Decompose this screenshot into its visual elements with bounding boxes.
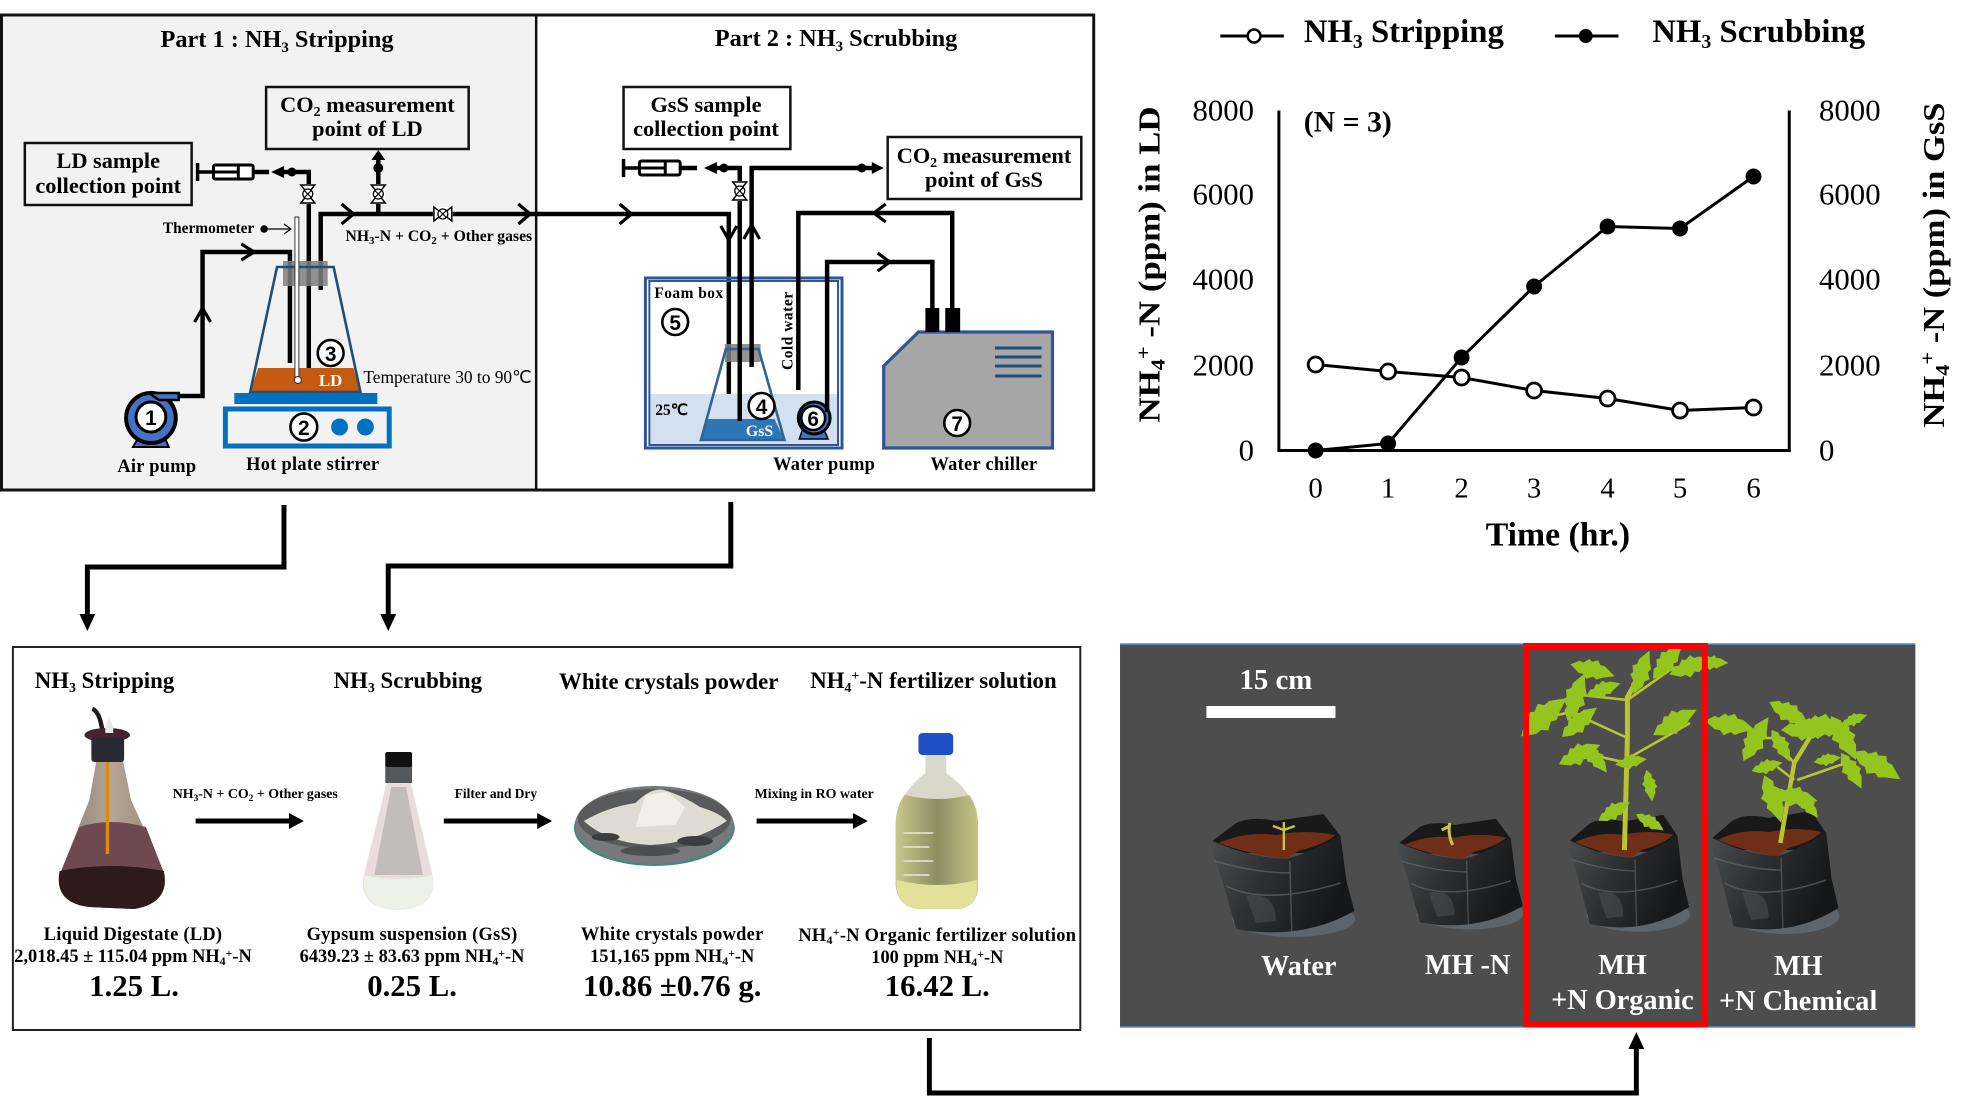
box: CO2 measurement point of LD: 2 (314, 105, 321, 120)
arrow: part 2 to scrubbing (380, 502, 731, 631)
text: white crystals: 151,165 ppm NH (590, 946, 722, 966)
box: LD sample collection point (25, 143, 192, 205)
photo: liquid digestate flask (59, 709, 165, 909)
label: filter and dry: Filter and Dry (455, 786, 537, 801)
text: organic fertilizer: + (833, 925, 840, 939)
label: water: Water (1261, 951, 1336, 982)
label: water pump: Water pump (773, 454, 875, 474)
text: gypsum suspension: Gypsum suspension (GsS) (307, 924, 518, 945)
heading: white crystals powder: White crystals powder (559, 669, 778, 694)
label: MH +N chemical: +N Chemical (1719, 986, 1877, 1017)
label: gases: NH (173, 787, 194, 802)
pipe: CO2 branch (371, 150, 385, 214)
photo: gypsum suspension flask (363, 752, 433, 910)
box: CO2 measurement point of GsS: CO (897, 143, 930, 168)
left axis ticks: 6000 (1193, 176, 1254, 212)
heading: fertilizer solution: NH (810, 668, 844, 693)
box: CO2 measurement point of GsS: 2 (930, 156, 937, 171)
icon: water pump: 6 (807, 408, 819, 431)
left axis ticks: 0 (1239, 432, 1254, 468)
legend: scrubbing: NH (1652, 14, 1701, 50)
badge: 5 (662, 309, 688, 335)
box: LD sample collection point: LD sample (56, 148, 160, 173)
x axis ticks: 4 (1600, 472, 1615, 505)
right axis title: -N (ppm) in GsS (1916, 102, 1951, 352)
icon: hot plate stirrer: 2 (298, 417, 310, 440)
right axis ticks: 8000 (1819, 92, 1881, 128)
heading: part 1: Part 1 : NH (160, 26, 281, 53)
text: gypsum suspension: 4 (492, 954, 498, 968)
badge: 4: 4 (756, 396, 768, 419)
arrow: fertilizer to plants (929, 1032, 1644, 1093)
text: liquid digestate: Liquid Digestate (LD) (44, 924, 222, 945)
right axis title: NH (1916, 381, 1951, 428)
x axis title: Time (hr.) (1486, 516, 1630, 554)
arrow: part 1 to stripping (79, 505, 284, 631)
left axis title: -N (ppm) in LD (1132, 106, 1167, 346)
label: water chiller: Water chiller (930, 454, 1038, 474)
text: organic fertilizer: 16.42 L. (885, 968, 990, 1003)
label: gases: + Other gases (253, 787, 338, 802)
box: CO2 measurement point of GsS: measurement (937, 143, 1072, 168)
panel: schematic frame (1, 15, 1094, 490)
text: white crystals (581, 924, 764, 1003)
icon: air pump: 1 (145, 407, 157, 430)
panel: plant photo (1120, 637, 1915, 1027)
foam box (645, 278, 842, 448)
label: gases: 3 (194, 794, 199, 804)
flask: LD (250, 217, 360, 392)
line chart (1132, 92, 1954, 554)
scale: 15 cm (1206, 664, 1335, 718)
x axis ticks: 5 (1673, 472, 1687, 505)
text: liquid digestate: 2,018.45 ± 115.04 ppm NH (14, 946, 220, 966)
text: organic fertilizer: + (977, 947, 984, 961)
text: organic fertilizer: 4 (826, 933, 833, 947)
text: organic fertilizer: NH (798, 925, 826, 945)
valve: inline (433, 207, 453, 221)
text: liquid digestate (14, 924, 252, 1003)
label: cold water: Cold water (779, 291, 796, 370)
heading: part 1: 3 (281, 40, 289, 56)
arrow: to scrubbing (196, 813, 304, 829)
text: gypsum suspension: 0.25 L. (367, 968, 457, 1003)
photo edges (1120, 644, 1915, 1027)
box: CO2 measurement point of LD: CO (280, 92, 314, 117)
heading: part 2: 3 (836, 39, 843, 55)
x axis ticks: 3 (1527, 472, 1541, 505)
label: gas mixture: NH (346, 228, 369, 245)
series: scrubbing (1308, 168, 1761, 458)
left axis ticks: 8000 (1193, 92, 1254, 128)
label: MH +N organic (1551, 950, 1694, 1016)
label: gas mixture: 2 (431, 235, 437, 247)
legend: stripping: NH (1304, 14, 1353, 50)
label: hot plate stirrer: Hot plate stirrer (246, 454, 379, 474)
pipe: water pump line (827, 253, 932, 412)
text: gypsum suspension: -N (505, 946, 525, 966)
x axis ticks: 6 (1746, 472, 1761, 505)
icon: water chiller: 7 (951, 413, 963, 436)
legend: stripping: 3 (1353, 31, 1363, 53)
photo background (1120, 644, 1915, 1027)
box: CO2 measurement point of GsS: point of GsS (925, 167, 1043, 192)
right axis title: 4 (1932, 365, 1954, 376)
legend (1220, 14, 1866, 53)
box: CO2 measurement point of GsS (888, 137, 1081, 199)
heading: NH3 stripping: NH (35, 668, 69, 693)
heading: part 2: Part 2 : NH (715, 25, 836, 52)
box: GsS sample collection point: collection point (633, 116, 779, 141)
label: MH +N chemical (1719, 951, 1877, 1017)
text: organic fertilizer: 100 ppm NH (871, 947, 971, 967)
heading: NH3 scrubbing: NH (334, 668, 368, 693)
text: organic fertilizer (798, 925, 1076, 1003)
panel: part 1 background (1, 15, 536, 490)
text: white crystals: 10.86 ±0.76 g. (583, 968, 761, 1003)
text: white crystals: White crystals powder (581, 924, 764, 944)
divider between parts (535, 15, 537, 490)
left axis title: + (1133, 346, 1155, 359)
box: GsS sample collection point (624, 87, 790, 149)
panel frame (13, 647, 1080, 1030)
label: gas mixture: -N + CO (375, 228, 431, 245)
series: stripping (1308, 357, 1761, 418)
legend: scrubbing (1555, 14, 1866, 53)
heading: NH3 stripping: Stripping (76, 668, 175, 693)
box: CO2 measurement point of LD: measurement (321, 92, 455, 117)
label: temperature: Temperature 30 to 90℃ (363, 367, 532, 387)
x axis ticks: 1 (1381, 472, 1395, 505)
label: gases: -N + CO (198, 787, 249, 802)
label: MH +N chemical: MH (1774, 951, 1823, 982)
text: gypsum suspension: 6439.23 ± 83.63 ppm NH (300, 946, 492, 966)
heading: NH3 stripping: 3 (69, 681, 76, 696)
label: MH +N organic: MH (1598, 950, 1647, 981)
left axis ticks (1193, 92, 1254, 468)
pot: MH -N (1396, 819, 1524, 929)
text: white crystals: -N (735, 946, 755, 966)
pipe: cold water return (798, 204, 952, 390)
scale: 15 cm: 15 cm (1240, 664, 1312, 696)
legend: scrubbing: 3 (1701, 31, 1711, 53)
plant: MH +N organic (1512, 637, 1728, 932)
left axis title: NH (1132, 376, 1167, 422)
panel: process schematic (1, 15, 1094, 490)
right axis ticks: 2000 (1819, 347, 1881, 383)
flask: GsS: GsS (746, 423, 773, 440)
pot: water (1208, 814, 1355, 937)
legend: stripping (1220, 14, 1504, 53)
right axis ticks: 0 (1819, 432, 1834, 468)
text: organic fertilizer: -N (984, 947, 1004, 967)
flask: LD: 3 (325, 343, 336, 366)
photo: crystal powder dish (574, 786, 735, 866)
text: organic fertilizer: -N Organic fertilizer solution (840, 925, 1076, 945)
box: CO2 measurement point of LD: point of LD (312, 116, 423, 141)
right axis title: + (1917, 352, 1939, 365)
pipe: gas outlet to scrubber (321, 204, 737, 433)
label: MH +N organic: +N Organic (1551, 985, 1694, 1016)
left axis ticks: 4000 (1193, 261, 1254, 297)
flask: LD: LD (319, 371, 342, 390)
sample size note: (N = 3) (1304, 105, 1392, 139)
axes (1279, 110, 1789, 450)
heading: NH3 scrubbing: 3 (368, 681, 375, 696)
text: gypsum suspension: + (498, 946, 505, 960)
text: white crystals: 4 (722, 954, 728, 968)
right axis ticks (1819, 92, 1881, 468)
left axis title: 4 (1148, 359, 1170, 370)
label: gas mixture: 3 (369, 235, 375, 247)
badge: 4 (749, 393, 774, 419)
text: liquid digestate: + (226, 946, 233, 960)
badge: 5: 5 (669, 312, 681, 335)
text: organic fertilizer: 4 (971, 955, 977, 969)
arrow: mixing in RO water (757, 813, 868, 829)
heading: fertilizer solution: + (851, 669, 859, 684)
box: GsS sample collection point: GsS sample (650, 92, 762, 117)
label: gas mixture: + Other gases (437, 228, 532, 245)
text: gypsum suspension (300, 924, 525, 1003)
text: liquid digestate: -N (232, 946, 252, 966)
icon: GsS syringe (624, 159, 697, 177)
icon: LD syringe (198, 163, 269, 181)
x axis ticks: 0 (1308, 472, 1323, 505)
highlight frame (1526, 646, 1705, 1024)
panel: process results (13, 647, 1080, 1030)
heading: part 2: Scrubbing (843, 25, 957, 52)
label: mixing: Mixing in RO water (755, 787, 874, 802)
plant: MH +N chemical (1703, 692, 1907, 934)
legend: stripping: Stripping (1363, 14, 1504, 50)
heading: NH3 scrubbing: Scrubbing (375, 668, 483, 693)
label: foam box: Foam box (654, 285, 724, 302)
label: air pump: Air pump (117, 456, 196, 476)
icon: water pump (798, 402, 830, 439)
arrow: filter and dry (444, 813, 552, 829)
icon: water chiller (884, 308, 1053, 448)
right axis ticks: 4000 (1819, 261, 1881, 297)
icon: air pump (126, 393, 179, 447)
heading: part 1: Stripping (289, 26, 394, 53)
left axis ticks: 2000 (1193, 347, 1254, 383)
legend: scrubbing: Scrubbing (1711, 14, 1866, 50)
label: thermometer: Thermometer (163, 220, 254, 237)
label: 25 C: 25℃ (655, 402, 688, 419)
box: LD sample collection point: collection point (35, 173, 182, 198)
x axis ticks: 2 (1454, 472, 1469, 505)
text: liquid digestate: 1.25 L. (89, 968, 179, 1003)
label: MH -N: MH -N (1425, 950, 1511, 981)
label: gases: 2 (249, 794, 254, 804)
box: CO2 measurement point of LD (266, 87, 469, 149)
right axis ticks: 6000 (1819, 176, 1881, 212)
heading: fertilizer solution: -N fertilizer solution (859, 668, 1057, 693)
x axis ticks (1308, 472, 1761, 505)
text: white crystals: + (728, 946, 735, 960)
flask: GsS (701, 344, 784, 440)
pipes: GsS sample and gas outlet (704, 162, 884, 421)
pipe: air inlet (179, 244, 290, 396)
pipe: LD sampling line (271, 166, 315, 380)
photo: fertilizer bottle (896, 733, 978, 909)
text: liquid digestate: 4 (220, 954, 226, 968)
heading: fertilizer solution: 4 (844, 681, 851, 696)
icon: hot plate stirrer (225, 393, 389, 446)
